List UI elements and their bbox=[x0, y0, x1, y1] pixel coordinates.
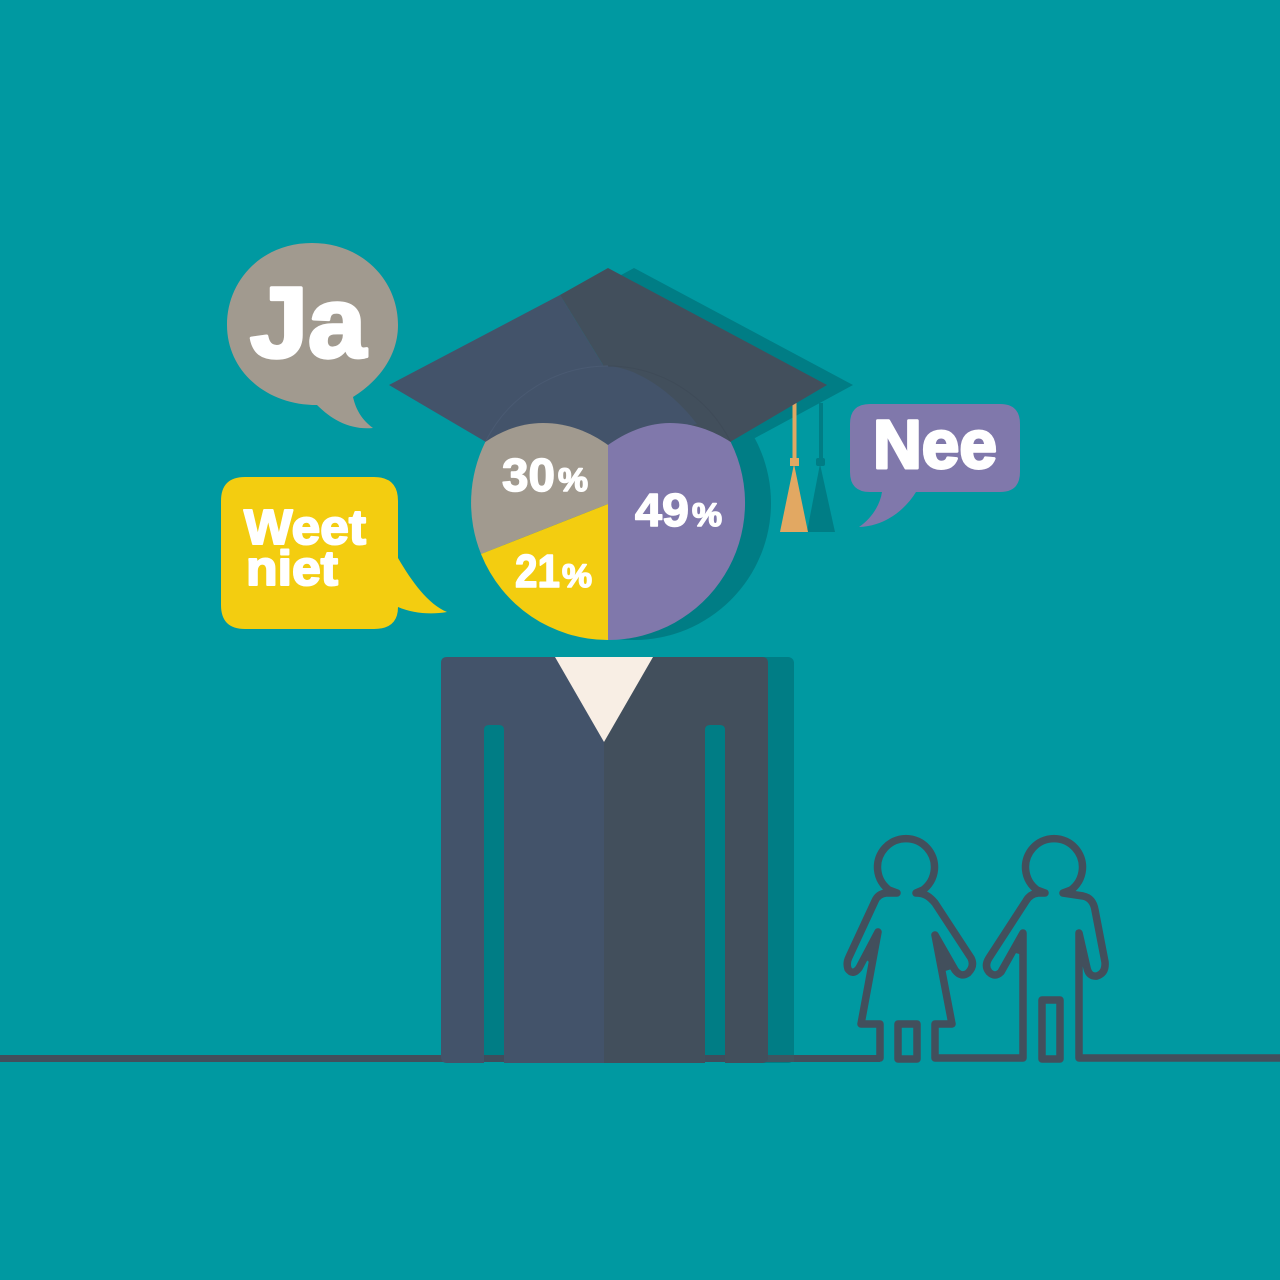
speech bubble: Ja bbox=[227, 243, 398, 428]
ground line bbox=[0, 1055, 880, 1062]
children outline icons bbox=[847, 839, 1280, 1059]
tassel shadow bbox=[807, 403, 835, 532]
label 30%: % bbox=[558, 462, 588, 498]
boy legs bbox=[1042, 1000, 1060, 1059]
label 30% bbox=[502, 449, 588, 501]
mortarboard cap bbox=[389, 268, 827, 445]
label 21% bbox=[515, 545, 592, 597]
speech bubble: Nee bbox=[850, 404, 1020, 527]
label 30%: 30 bbox=[502, 449, 555, 501]
gown shadow bbox=[700, 657, 794, 1063]
cap shadow bbox=[612, 268, 853, 438]
girl and boy continuous outline bbox=[847, 839, 1280, 1058]
right sleeve gap bbox=[705, 725, 725, 1063]
label 21%: 21 bbox=[515, 545, 560, 597]
label 21%: % bbox=[562, 558, 592, 594]
speech bubble: Weet niet: Weet bbox=[244, 501, 366, 555]
label 49%: 49 bbox=[635, 484, 689, 536]
head shadow bbox=[497, 366, 771, 640]
underarm wedges bbox=[864, 932, 1087, 972]
speech bubble: Ja: Ja bbox=[250, 267, 367, 379]
slice: Nee 49% bbox=[608, 423, 745, 640]
speech bubble: Weet niet: niet bbox=[246, 542, 338, 596]
gown bbox=[441, 657, 768, 1064]
label 49% bbox=[635, 484, 722, 536]
speech bubble: Weet niet bbox=[221, 477, 447, 629]
slice: Ja 30% bbox=[471, 423, 608, 554]
tassel bbox=[780, 403, 808, 532]
speech bubble: Nee: Nee bbox=[873, 406, 997, 483]
pie chart head bbox=[471, 423, 745, 640]
slice: Weet niet 21% bbox=[481, 504, 608, 640]
left sleeve gap bbox=[484, 725, 504, 1063]
graduate figure bbox=[389, 268, 853, 1064]
label 49%: % bbox=[692, 497, 722, 533]
girl legs bbox=[898, 1024, 917, 1059]
collar bbox=[555, 657, 653, 742]
